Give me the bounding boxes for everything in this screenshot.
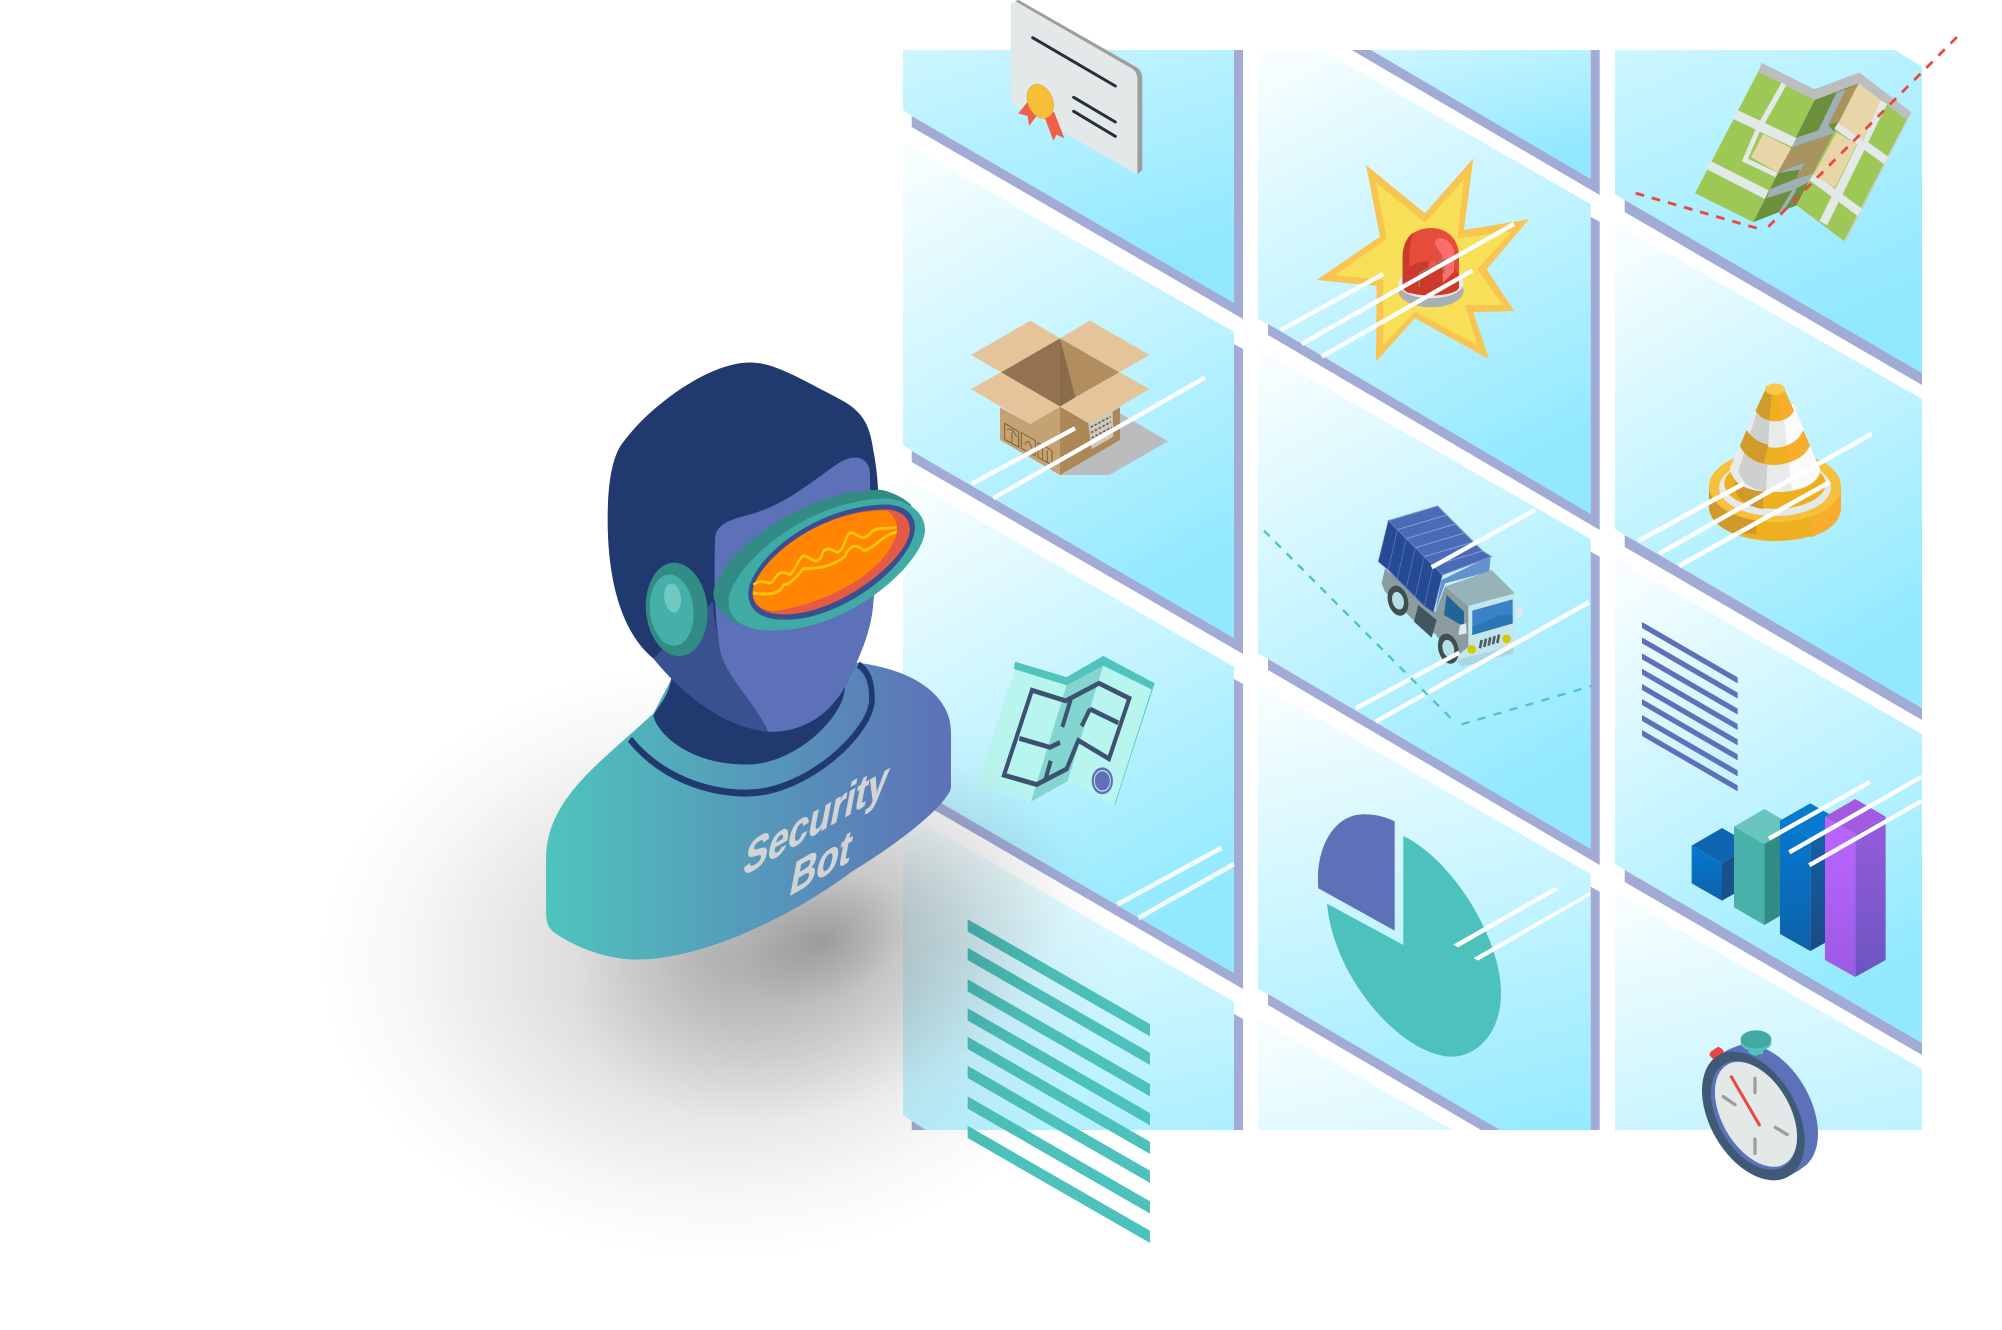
chart: isometric bar chart: [1692, 777, 1922, 977]
bar 4: [1825, 799, 1886, 977]
icon: garbage truck: [1264, 506, 1592, 724]
bot: head: [608, 362, 879, 732]
icon: floor plan map: [977, 656, 1155, 805]
panel: isometric glass wall grid: [903, 50, 1922, 1130]
icon: traffic cone: [1638, 384, 1872, 566]
bot: shirt label: Security: [740, 749, 894, 887]
icon: stopwatch: [1681, 1027, 1839, 1198]
bar 2: [1734, 809, 1795, 925]
bot: visor: [713, 490, 925, 631]
icon: open cardboard box: [971, 321, 1205, 498]
icon: text lines in column 1: [968, 919, 1150, 1243]
bar 3: [1780, 803, 1841, 951]
panel: column 3: [1615, 50, 1922, 1130]
panel: column 2: [1258, 50, 1600, 1130]
figure: security bot: [546, 362, 951, 960]
bar 1: [1692, 828, 1753, 901]
bot: ear: [640, 557, 714, 662]
icon: floor plan road lines: [1117, 848, 1234, 918]
bot: shirt label: Bot: [786, 817, 857, 907]
icon: alarm siren on starburst: [1281, 158, 1529, 362]
bot: torso: [546, 626, 951, 960]
icon: certificate: [1011, 0, 1142, 174]
icon: folded city map: [1636, 36, 1958, 241]
icon: text lines in column 3: [1642, 622, 1738, 791]
shadow under robot: [300, 640, 1140, 1280]
panel: column 1: [903, 50, 1243, 1130]
chart: pie chart: [1318, 814, 1590, 1057]
